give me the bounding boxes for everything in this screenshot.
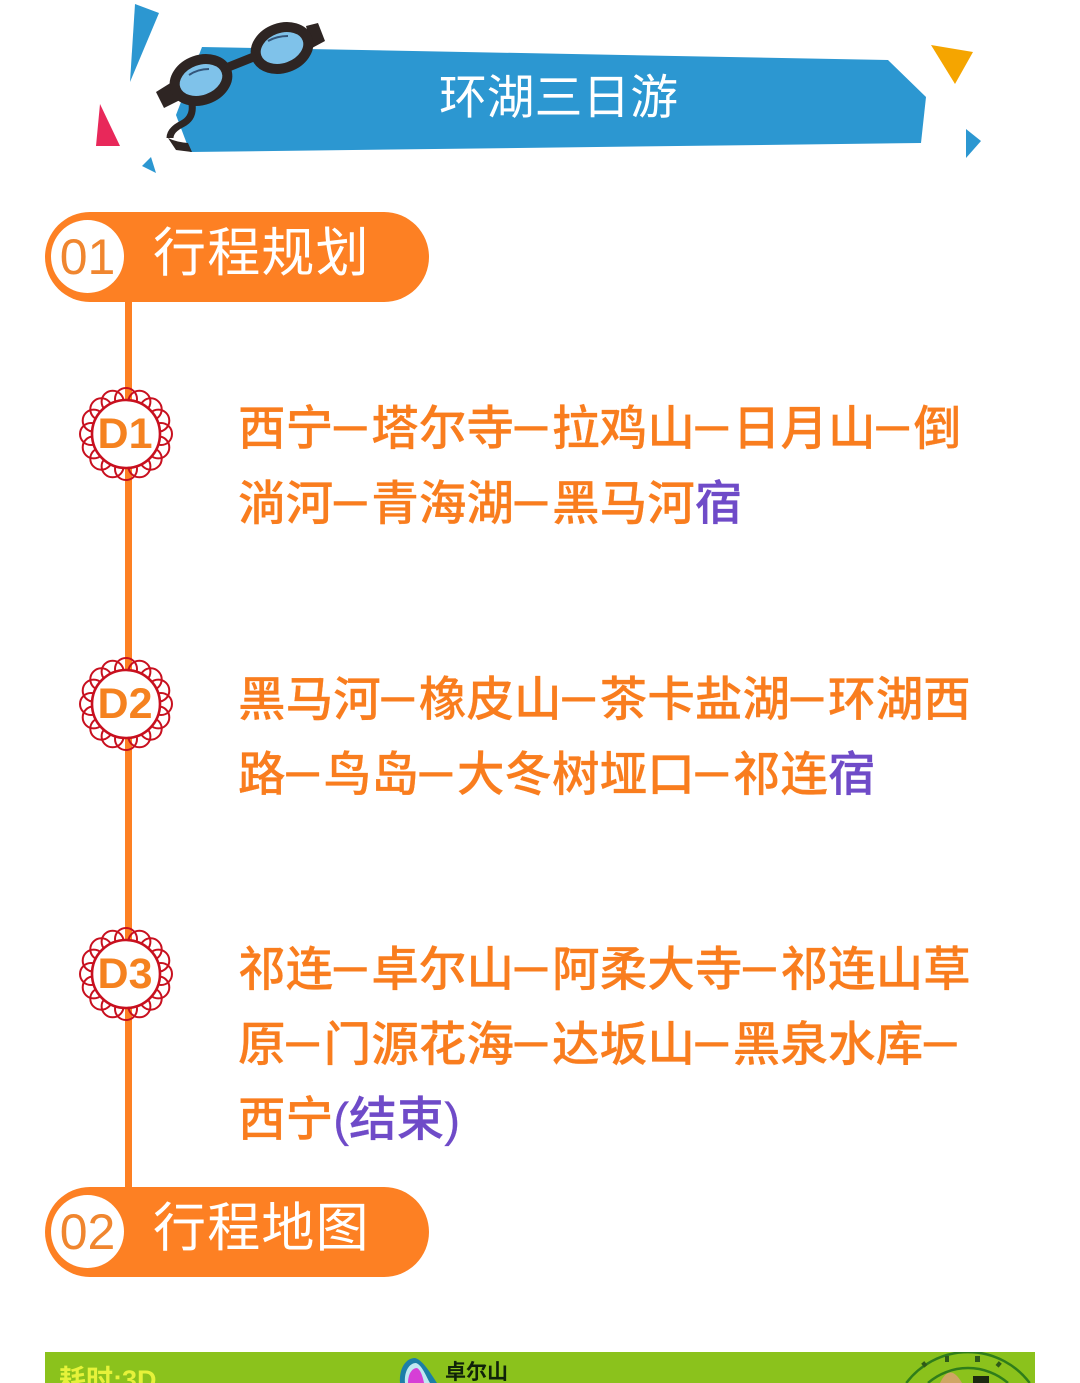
heading: 行程规划 bbox=[153, 224, 370, 283]
itinerary day 1 text: 西宁—塔尔寺—拉鸡山—日月山—倒 bbox=[238, 403, 961, 456]
day marker D3: D3 bbox=[98, 950, 152, 998]
icon: swimming goggles bbox=[156, 20, 325, 152]
itinerary day 3 text: 祁连—卓尔山—阿柔大寺—祁连山草 bbox=[238, 944, 971, 997]
day marker D2 bbox=[79, 657, 173, 751]
title banner bbox=[96, 4, 981, 173]
icon: map pin bbox=[400, 1358, 437, 1383]
icon: round seal bbox=[906, 1352, 1030, 1383]
heading: 行程地图 bbox=[153, 1199, 370, 1258]
map icons bbox=[400, 1352, 1031, 1383]
itinerary day 2 text: 路—鸟岛—大冬树垭口—祁连宿 bbox=[238, 749, 876, 802]
section header 01 bbox=[45, 212, 429, 302]
itinerary day 2 text: 黑马河—橡皮山—茶卡盐湖—环湖西 bbox=[238, 674, 971, 727]
banner shape bbox=[176, 47, 926, 152]
day marker D1: D1 bbox=[98, 410, 152, 458]
day marker D3 bbox=[79, 927, 173, 1021]
itinerary day 3 text: 西宁(结束) bbox=[238, 1094, 460, 1147]
itinerary day 2 text bbox=[238, 674, 971, 802]
section header 02 bbox=[45, 1187, 429, 1277]
itinerary day 3 text: 原—门源花海—达坂山—黑泉水库— bbox=[238, 1019, 960, 1072]
itinerary day 1 text bbox=[238, 403, 961, 531]
day marker D2: D2 bbox=[98, 680, 152, 728]
timeline vertical line bbox=[125, 298, 132, 1190]
number badge 02 bbox=[51, 1195, 124, 1268]
number badge 01 bbox=[51, 220, 124, 293]
itinerary day 3 text bbox=[238, 944, 971, 1147]
number badge 02: 02 bbox=[60, 1204, 115, 1260]
day marker D1 bbox=[79, 387, 173, 481]
itinerary day 1 text: 淌河—青海湖—黑马河宿 bbox=[238, 478, 742, 531]
map preview strip bbox=[45, 1352, 1035, 1383]
decorative triangles bbox=[96, 4, 981, 173]
banner title text: 环湖三日游 bbox=[439, 72, 678, 125]
number badge 01: 01 bbox=[60, 229, 115, 285]
